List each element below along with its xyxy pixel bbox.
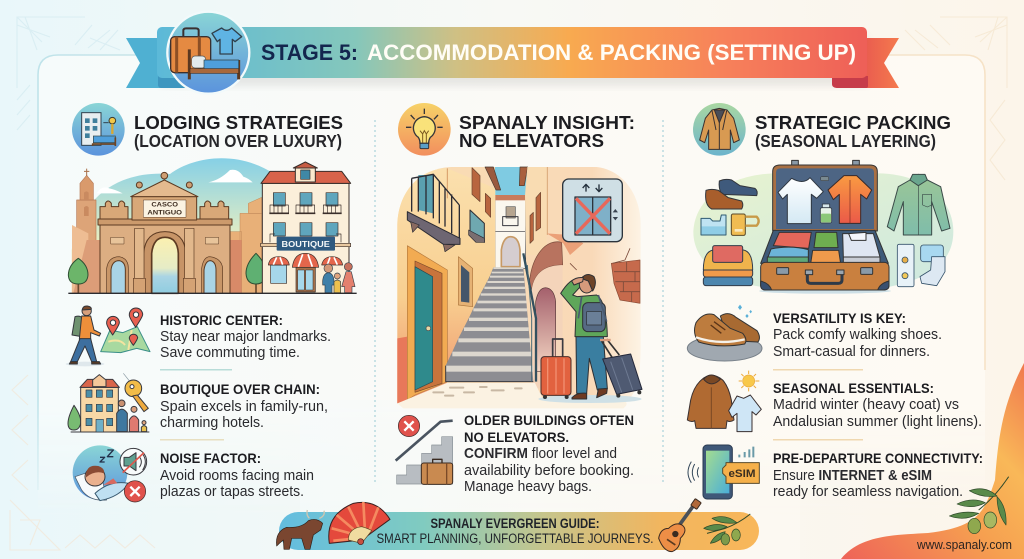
- lodging heading: [72, 103, 343, 156]
- panel: strategic packing: [687, 103, 983, 500]
- suitcase lid: [773, 160, 877, 231]
- illustration: historic gate and boutique hotel: ANTIGUO: [147, 210, 182, 217]
- item: historic center: HISTORIC CENTER:: [160, 312, 283, 328]
- title banner: [126, 27, 899, 88]
- main content panel: [37, 54, 986, 490]
- folded stack: [703, 246, 753, 286]
- gate: [98, 172, 232, 293]
- icon: suitcase, shirt and bed badge: [167, 12, 249, 94]
- icon: guitar: [659, 499, 701, 552]
- no elevator sign: [563, 179, 622, 242]
- item: noise factor: plazas or tapas streets.: [160, 484, 304, 500]
- green shirt: [887, 174, 950, 235]
- lodging heading: (LOCATION OVER LUXURY): [134, 131, 342, 151]
- title text: STAGE 5:: [261, 40, 358, 65]
- insight note: NO ELEVATORS.: [464, 429, 569, 445]
- insight heading: NO ELEVATORS: [459, 130, 604, 151]
- insight note: availability before booking.: [464, 463, 634, 479]
- item: boutique over chain: BOUTIQUE OVER CHAIN:: [160, 381, 320, 397]
- footer banner: [276, 499, 759, 552]
- shoes: [706, 179, 757, 209]
- bottle: [820, 204, 832, 223]
- packing heading: [693, 103, 951, 156]
- item: historic center: [66, 306, 331, 366]
- toiletries: [897, 244, 945, 287]
- illustration: open suitcase and clothes: [693, 160, 953, 294]
- title text: ACCOMMODATION & PACKING (SETTING UP): [367, 40, 856, 65]
- cracked bricks: [570, 248, 640, 303]
- panel: spanaly insight: [396, 103, 642, 495]
- icon: sleeper with muted speaker: [73, 445, 147, 502]
- insight note: [396, 412, 634, 495]
- footer banner: SMART PLANNING, UNFORGETTABLE JOURNEYS.: [376, 531, 654, 546]
- suitcase base: [759, 230, 891, 294]
- icon: walking shoes on cobbles: [687, 305, 762, 361]
- esim label: eSIM: [728, 468, 756, 480]
- boutique sign: BOUTIQUE: [281, 239, 330, 249]
- item: versatility: Pack comfy walking shoes.: [773, 327, 942, 343]
- list: lodging tips: [66, 306, 331, 502]
- packing heading: STRATEGIC PACKING: [755, 112, 951, 133]
- family: [323, 263, 355, 293]
- grey suitcase: [600, 339, 642, 398]
- left tower: [72, 169, 100, 293]
- icon: no stairs lift with suitcase: [396, 415, 453, 484]
- footer banner: SPANALY EVERGREEN GUIDE:: [430, 516, 600, 531]
- icon: light bulb: [398, 103, 451, 156]
- illustration: traveller at stairs with no elevator: [397, 167, 642, 408]
- item: connectivity: PRE-DEPARTURE CONNECTIVITY:: [773, 450, 983, 466]
- icon: coat: [693, 103, 746, 156]
- insight heading: SPANALY INSIGHT:: [459, 112, 635, 133]
- packing heading: (SEASONAL LAYERING): [755, 131, 936, 151]
- item: noise factor: [73, 445, 314, 502]
- stairs: [446, 253, 536, 382]
- icon: bull: [276, 510, 324, 549]
- insight heading: [398, 103, 635, 156]
- gate sign: CASCO: [151, 202, 178, 209]
- right wall: [525, 167, 547, 388]
- insight note: CONFIRM floor level and: [464, 446, 617, 462]
- website url: www.spanaly.com: [916, 538, 1012, 552]
- item: versatility: Smart-casual for dinners.: [773, 344, 930, 360]
- item: connectivity: Ensure INTERNET & eSIM: [773, 468, 932, 484]
- icon: hotel, key and family: [68, 373, 149, 432]
- item: seasonal essentials: SEASONAL ESSENTIALS:: [773, 380, 934, 396]
- list: packing tips: [687, 305, 983, 500]
- white t-shirt: [778, 178, 823, 224]
- lodging heading: LODGING STRATEGIES: [134, 112, 343, 133]
- documents: [701, 214, 759, 235]
- item: boutique over chain: charming hotels.: [160, 415, 264, 431]
- door: [397, 246, 447, 403]
- tree right: [246, 253, 266, 293]
- item: noise factor: NOISE FACTOR:: [160, 450, 261, 466]
- tree left: [68, 258, 88, 293]
- left wall: [397, 168, 495, 403]
- boutique sign: [277, 237, 335, 251]
- item: seasonal essentials: [687, 371, 982, 432]
- icon: red fan: [329, 502, 390, 545]
- insight note: Manage heavy bags.: [464, 479, 592, 495]
- column dividers: [375, 120, 663, 482]
- item: seasonal essentials: Madrid winter (heavy coat) vs: [773, 397, 959, 413]
- icon: phone with esim: [688, 445, 759, 499]
- item: historic center: Save commuting time.: [160, 345, 300, 361]
- item: versatility: [687, 305, 942, 361]
- item: versatility: VERSATILITY IS KEY:: [773, 310, 906, 326]
- icon: hiker and map: [66, 306, 150, 366]
- item: seasonal essentials: Andalusian summer (light linens).: [773, 414, 982, 430]
- icon: olive sprig: [704, 514, 750, 545]
- item: boutique over chain: [68, 373, 328, 432]
- red suitcase: [541, 339, 571, 399]
- ground: [397, 383, 627, 408]
- illustration: historic gate and boutique hotel: [68, 158, 357, 293]
- item: boutique over chain: Spain excels in family-run,: [160, 399, 328, 415]
- traveller: [561, 275, 607, 399]
- balcony: [407, 174, 460, 252]
- decorative bottom-right wave: [841, 363, 1024, 559]
- icon: coat, shirt and sun: [687, 371, 761, 432]
- panel: lodging strategies: [66, 103, 357, 502]
- item: connectivity: [688, 445, 983, 500]
- item: historic center: Stay near major landmarks.: [160, 329, 331, 345]
- sky and far building: [495, 167, 527, 199]
- item: noise factor: Avoid rooms facing main: [160, 468, 314, 484]
- boutique hotel: [261, 162, 351, 293]
- insight note: OLDER BUILDINGS OFTEN: [464, 412, 634, 428]
- icon: hotel and key: [72, 103, 125, 156]
- item: connectivity: ready for seamless navigation.: [773, 484, 963, 500]
- icon: corner olive branch: [949, 477, 1009, 534]
- orange shirt: [828, 176, 872, 223]
